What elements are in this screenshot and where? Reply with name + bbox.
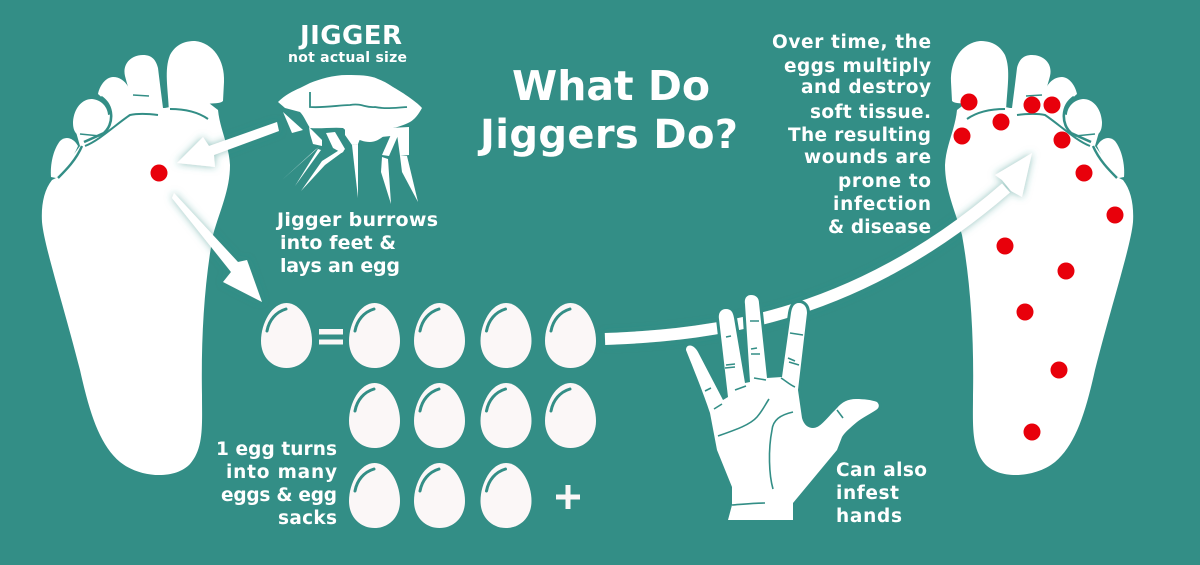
arrow: jigger to foot bbox=[177, 122, 279, 167]
caption: tissue destruction: infection bbox=[833, 194, 931, 215]
left foot bbox=[42, 41, 230, 475]
jigger heading bbox=[288, 21, 407, 66]
title bbox=[477, 62, 738, 158]
red dot: burrow site bbox=[150, 164, 168, 182]
caption: tissue destruction: prone to bbox=[838, 171, 931, 192]
title: What Do bbox=[512, 62, 710, 110]
eggs grid bbox=[349, 303, 596, 528]
caption: tissue destruction bbox=[772, 32, 931, 238]
caption: tissue destruction: and destroy bbox=[801, 77, 931, 98]
jigger heading: JIGGER bbox=[298, 21, 402, 51]
jigger heading: not actual size bbox=[288, 50, 407, 66]
plus sign bbox=[556, 485, 580, 509]
caption: egg multiplication bbox=[216, 439, 337, 529]
caption: tissue destruction: eggs multiply bbox=[784, 56, 931, 77]
arrow: foot to egg bbox=[172, 193, 262, 302]
caption: egg multiplication: eggs & egg bbox=[221, 485, 337, 506]
caption: tissue destruction: Over time, the bbox=[772, 32, 931, 53]
first egg bbox=[261, 303, 312, 368]
title: Jiggers Do? bbox=[477, 112, 738, 158]
caption: jigger burrows: lays an egg bbox=[280, 255, 400, 277]
caption: jigger burrows bbox=[275, 209, 438, 277]
curved arrow: eggs to right foot bbox=[605, 153, 1032, 339]
red dots: infestation sites on right foot bbox=[954, 94, 1124, 440]
caption: can also infest hands: hands bbox=[836, 506, 902, 527]
right foot bbox=[945, 41, 1133, 475]
caption: tissue destruction: & disease bbox=[828, 217, 931, 238]
caption: tissue destruction: wounds are bbox=[804, 147, 931, 168]
caption: jigger burrows: Jigger burrows bbox=[275, 209, 438, 231]
caption: can also infest hands bbox=[836, 460, 927, 527]
caption: jigger burrows: into feet & bbox=[280, 232, 396, 254]
caption: egg multiplication: 1 egg turns bbox=[216, 439, 337, 460]
caption: can also infest hands: Can also bbox=[836, 460, 927, 481]
icon: jigger insect bbox=[278, 75, 422, 204]
icon: hand bbox=[686, 295, 879, 520]
caption: tissue destruction: soft tissue. bbox=[810, 102, 931, 123]
equals sign bbox=[319, 329, 343, 344]
caption: egg multiplication: sacks bbox=[278, 508, 337, 529]
caption: egg multiplication: into many bbox=[226, 462, 337, 483]
caption: tissue destruction: The resulting bbox=[788, 125, 931, 146]
caption: can also infest hands: infest bbox=[836, 483, 899, 504]
